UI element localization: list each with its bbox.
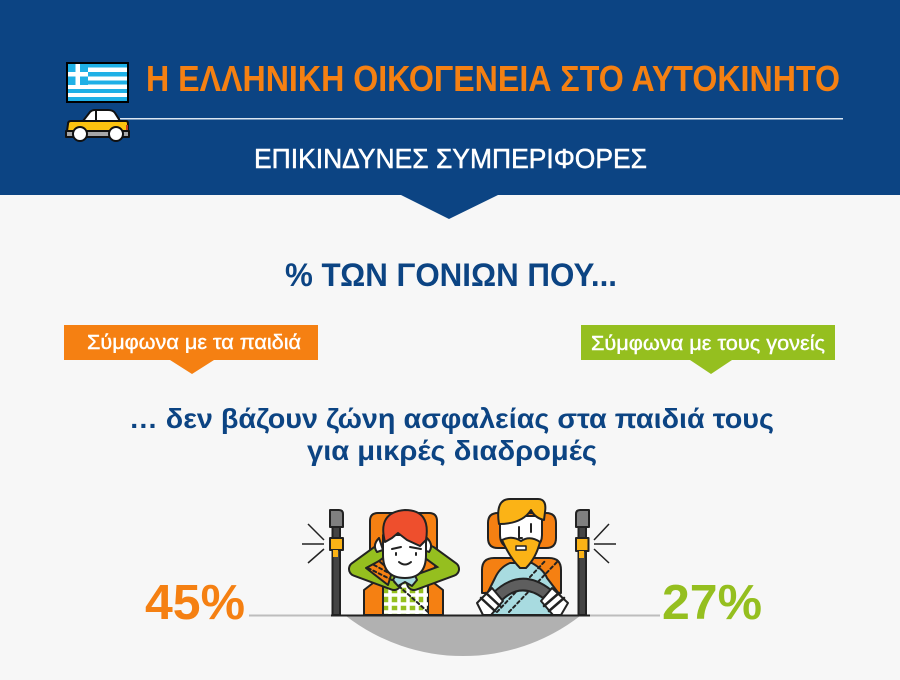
steering wheel bbox=[493, 579, 551, 600]
face bbox=[383, 535, 426, 578]
header divider line bbox=[120, 118, 843, 120]
shoulder strap bbox=[366, 561, 392, 585]
stat: 45 percent: 45% bbox=[145, 576, 245, 630]
checked shirt bbox=[383, 575, 428, 615]
collar bbox=[393, 573, 417, 586]
right arm fill bbox=[414, 553, 452, 583]
left arm fill bbox=[356, 553, 394, 583]
seat bbox=[482, 558, 561, 593]
eyes and nose bbox=[519, 524, 531, 538]
face bbox=[500, 516, 542, 550]
legend tag: according to children: Σύμφωνα με τα παιδιά bbox=[87, 332, 301, 354]
statement text: για μικρές διαδρομές bbox=[307, 435, 597, 466]
legend tag: according to parents bbox=[581, 325, 835, 374]
left arm bbox=[356, 553, 394, 583]
belt dashes bbox=[497, 560, 557, 612]
facial features bbox=[392, 547, 421, 564]
stat: 27 percent: 27% bbox=[662, 576, 762, 630]
icon: father driver with beard bbox=[477, 499, 568, 615]
beard bbox=[502, 538, 540, 568]
subtitle: ΕΠΙΚΙΝΔΥΝΕΣ ΣΥΜΠΕΡΙΦΟΡΕΣ bbox=[254, 143, 647, 174]
left hand bbox=[477, 588, 503, 615]
right hand bbox=[541, 588, 568, 615]
legend tag: according to parents: Σύμφωνα με τους γονείς bbox=[591, 333, 825, 355]
finger stripes bbox=[481, 593, 564, 611]
title: Η ΕΛΛΗΝΙΚΗ ΟΙΚΟΓΕΝΕΙΑ ΣΤΟ ΑΥΤΟΚΙΝΗΤΟ bbox=[146, 58, 840, 99]
hair bbox=[498, 499, 545, 524]
headrest and seat bbox=[364, 513, 443, 615]
icon: left seat belt pillar bbox=[302, 510, 343, 615]
statement text: … δεν βάζουν ζώνη ασφαλείας στα παιδιά τους bbox=[129, 403, 774, 434]
shirt bbox=[484, 563, 566, 615]
icon: child passenger with hands behind head bbox=[356, 510, 452, 615]
section heading: % ΤΩΝ ΓΟΝΙΩΝ ΠΟΥ... bbox=[285, 257, 617, 293]
right arm bbox=[414, 553, 452, 583]
legend tag: according to children bbox=[64, 325, 318, 374]
headrest bbox=[488, 513, 556, 548]
icon: right seat belt pillar bbox=[576, 510, 616, 615]
hands bbox=[375, 538, 431, 552]
ground illustration: road and shadow bbox=[249, 614, 660, 656]
header banner bbox=[0, 0, 900, 219]
seat belt dashes bbox=[368, 565, 428, 612]
hair bbox=[383, 510, 427, 546]
statement text bbox=[129, 403, 774, 466]
icon: yellow car bbox=[66, 110, 129, 141]
icon: Greek flag bbox=[66, 62, 129, 103]
